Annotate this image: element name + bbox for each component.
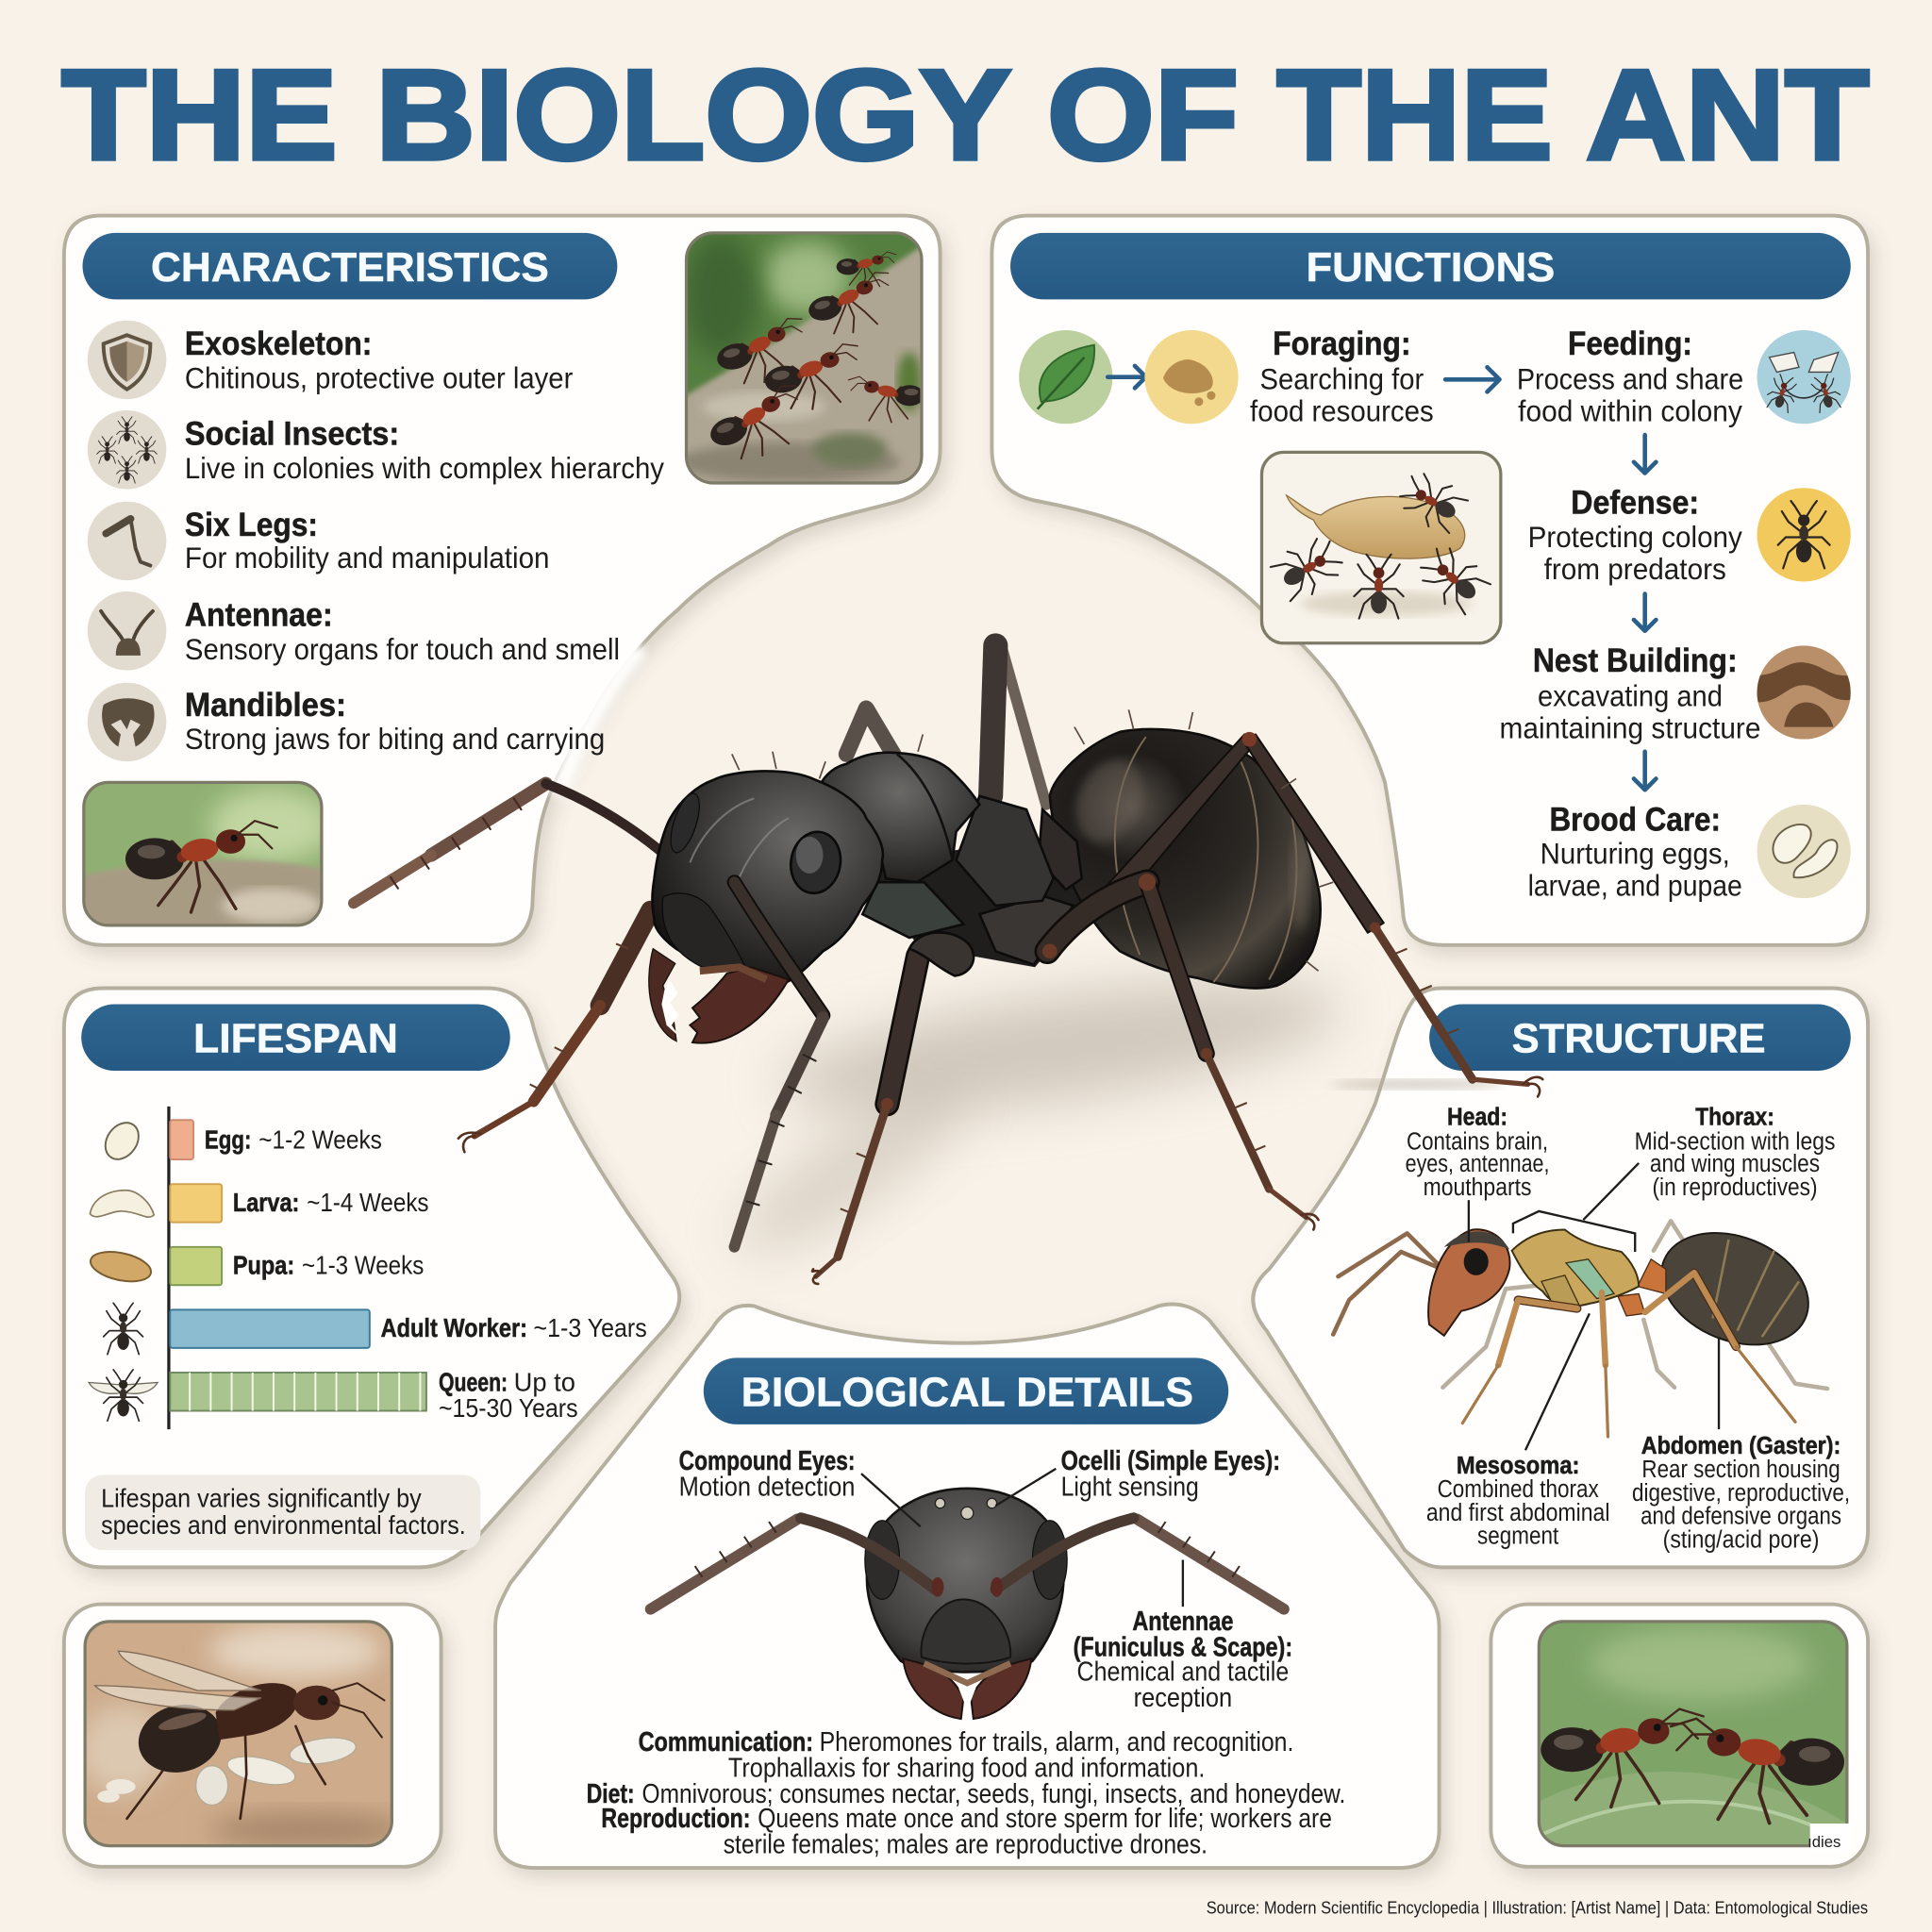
note: lifespan varies	[85, 1474, 480, 1550]
icon: social insects	[88, 410, 166, 490]
text: communication, diet, reproduction: Reproduction:	[601, 1804, 750, 1834]
far eye	[665, 791, 705, 856]
icon: food crumbs	[1144, 330, 1239, 424]
label: antennae	[1074, 1607, 1292, 1713]
icon: defense ant	[1757, 488, 1851, 581]
label: head: Head:	[1447, 1104, 1507, 1130]
text: social insects	[185, 416, 664, 485]
note: lifespan varies: species and environmental factors.	[101, 1510, 466, 1540]
text: communication, diet, reproduction: Diet:	[587, 1779, 635, 1809]
label: ocelli: Light sensing	[1061, 1473, 1199, 1503]
text: foraging	[1250, 325, 1434, 428]
heading pill: lifespan	[81, 1004, 510, 1071]
text: feeding: Feeding:	[1568, 325, 1692, 362]
label: pupa: ~1-3 Weeks	[302, 1251, 424, 1280]
panel: lifespan	[64, 989, 679, 1567]
label: antennae: (Funiculus & Scape):	[1074, 1632, 1292, 1662]
photo: ants carrying seed	[1261, 452, 1501, 643]
heading pill: functions	[1010, 233, 1851, 299]
illustration: central ant	[354, 643, 1542, 1284]
icon: antennae	[88, 591, 166, 671]
text: six legs: Six Legs:	[185, 507, 318, 543]
heading pill: biological details	[704, 1357, 1228, 1424]
label: queen: ~15-30 Years	[439, 1393, 578, 1423]
label: thorax: Thorax:	[1695, 1104, 1774, 1130]
photo: ants on a leaf: ıdies	[1807, 1833, 1840, 1851]
text: nest building: Nest Building:	[1533, 642, 1738, 679]
icon: pupa	[88, 1247, 154, 1287]
label: queen: Queen:	[439, 1368, 508, 1397]
label: ocelli: Ocelli (Simple Eyes):	[1061, 1446, 1280, 1476]
text: feeding: Process and share	[1517, 363, 1743, 396]
icon: trophallaxis	[1757, 330, 1851, 424]
source credit: Source: Modern Scientific Encyclopedia | Illustration: [Artist Name] | Data: Entomological Studies	[1207, 1897, 1868, 1917]
text: communication, diet, reproduction: Omnivorous; consumes nectar, seeds, fungi, insects, and honeydew.	[641, 1779, 1345, 1809]
label: abdomen: (sting/acid pore)	[1663, 1526, 1819, 1553]
bar: egg	[170, 1120, 193, 1159]
panel: characteristics	[64, 216, 941, 945]
text: foraging: Foraging:	[1273, 325, 1411, 362]
icon: larva	[90, 1191, 154, 1217]
text: nest building: maintaining structure	[1500, 711, 1760, 744]
label line: head	[1468, 1200, 1470, 1242]
near eye	[786, 828, 845, 897]
label: pupa	[233, 1251, 424, 1280]
label: mesosoma	[1426, 1453, 1609, 1550]
text: brood care: larvae, and pupae	[1528, 870, 1742, 903]
text: nest building	[1500, 642, 1760, 744]
heading pill: structure	[1429, 1004, 1851, 1071]
label: head	[1406, 1104, 1549, 1201]
gaster	[1050, 729, 1321, 989]
icon: worker ant	[104, 1303, 143, 1355]
photo: winged queen with brood	[79, 1622, 407, 1847]
text: nest building: excavating and	[1538, 679, 1723, 712]
near legs	[812, 734, 1542, 1284]
text: foraging: Searching for	[1260, 363, 1424, 396]
icon: nest	[1757, 645, 1851, 740]
text: defense: from predators	[1544, 553, 1726, 586]
clypeus	[662, 893, 745, 967]
near antenna	[734, 882, 823, 1247]
label line: mesosoma	[1525, 1313, 1590, 1450]
label line: antennae	[1182, 1560, 1184, 1607]
label: adult worker: ~1-3 Years	[534, 1313, 647, 1342]
icon: queen ant	[89, 1370, 158, 1421]
text: exoskeleton: Chitinous, protective outer layer	[185, 361, 573, 394]
body hairs	[732, 709, 1333, 971]
text: defense: Protecting colony	[1528, 521, 1742, 554]
label: abdomen: digestive, reproductive,	[1632, 1480, 1850, 1507]
text: exoskeleton	[185, 325, 573, 394]
mandibles	[649, 949, 789, 1043]
text: communication, diet, reproduction	[587, 1727, 1345, 1859]
text: social insects: Live in colonies with complex hierarchy	[185, 452, 664, 485]
label: mesosoma: Mesosoma:	[1457, 1453, 1579, 1479]
label: abdomen: Rear section housing	[1641, 1457, 1840, 1483]
bar: pupa	[170, 1247, 222, 1285]
icon: shield	[88, 321, 166, 399]
arrow	[1445, 367, 1500, 391]
text: exoskeleton: Exoskeleton:	[185, 325, 372, 362]
label: head: mouthparts	[1424, 1174, 1532, 1201]
text: feeding	[1517, 325, 1743, 428]
arrow	[1634, 435, 1656, 474]
label: queen	[439, 1368, 578, 1423]
panel: queen photo	[64, 1605, 441, 1867]
text: mandibles: Strong jaws for biting and carrying	[185, 723, 605, 756]
heading pill: characteristics	[83, 233, 617, 299]
icon: mandibles	[88, 683, 166, 761]
label: abdomen	[1632, 1433, 1850, 1553]
label: head: Contains brain,	[1407, 1129, 1548, 1156]
label: thorax: (in reproductives)	[1653, 1174, 1818, 1201]
label line: ocelli	[995, 1469, 1056, 1506]
note: lifespan varies: Lifespan varies significantly by	[101, 1483, 422, 1512]
text: social insects: Social Insects:	[185, 416, 399, 453]
text: communication, diet, reproduction: Communication:	[639, 1727, 813, 1757]
label: egg	[205, 1124, 382, 1154]
body backing	[862, 838, 1087, 967]
label: mesosoma: Combined thorax	[1438, 1476, 1599, 1503]
text: foraging: food resources	[1250, 395, 1434, 428]
text: defense	[1528, 485, 1742, 586]
label: abdomen: and defensive organs	[1641, 1504, 1841, 1530]
text: communication, diet, reproduction: Queens mate once and store sperm for life; workers are	[758, 1804, 1332, 1834]
head	[652, 771, 883, 983]
heading pill: lifespan: LIFESPAN	[193, 1016, 398, 1061]
illustration: ant head front view	[651, 1489, 1284, 1719]
icon: leaf	[1019, 330, 1112, 424]
text: antennae: Sensory organs for touch and smell	[185, 633, 620, 666]
text: mandibles	[185, 687, 605, 756]
label: ocelli	[1061, 1446, 1280, 1503]
label: egg: ~1-2 Weeks	[258, 1124, 382, 1154]
icon: brood	[1757, 805, 1851, 898]
photo: ants on a leaf	[1539, 1622, 1849, 1851]
label: compound eyes	[679, 1446, 855, 1503]
ground shadow	[718, 957, 1503, 1278]
diagram: labelled ant	[1333, 1212, 1827, 1437]
text: mandibles: Mandibles:	[185, 687, 346, 724]
text: brood care: Brood Care:	[1549, 801, 1721, 838]
bar: adult worker	[170, 1309, 370, 1348]
label: larva: Larva:	[233, 1188, 299, 1217]
label: thorax: Mid-section with legs	[1635, 1129, 1835, 1156]
label line: abdomen	[1718, 1337, 1720, 1429]
text: defense: Defense:	[1571, 485, 1699, 522]
label: adult worker	[381, 1313, 647, 1342]
label: larva: ~1-4 Weeks	[307, 1188, 429, 1217]
panel: functions	[991, 216, 1868, 945]
label: head: eyes, antennae,	[1406, 1151, 1549, 1177]
icon: egg	[98, 1116, 145, 1166]
label: pupa: Pupa:	[233, 1251, 294, 1280]
text: six legs: For mobility and manipulation	[185, 541, 550, 575]
far antenna	[354, 784, 677, 903]
bar: queen	[170, 1373, 426, 1411]
label: compound eyes: Motion detection	[679, 1473, 855, 1503]
chart: lifespan bars	[169, 1107, 426, 1429]
text: antennae: Antennae:	[185, 597, 333, 634]
text: brood care	[1528, 801, 1742, 903]
coxa	[909, 932, 974, 975]
text: brood care: Nurturing eggs,	[1541, 838, 1730, 871]
title: THE BIOLOGY OF THE ANT	[61, 42, 1869, 186]
label line: compound eyes	[861, 1474, 921, 1526]
text: communication, diet, reproduction: Pheromones for trails, alarm, and recognition.	[820, 1727, 1293, 1757]
label: abdomen: Abdomen (Gaster):	[1641, 1433, 1840, 1459]
label: thorax	[1635, 1104, 1835, 1201]
arrow	[1634, 752, 1656, 790]
label: mesosoma: segment	[1477, 1524, 1558, 1550]
label: compound eyes: Compound Eyes:	[679, 1446, 855, 1476]
label: antennae: reception	[1134, 1683, 1232, 1713]
panel: biological details	[495, 1305, 1440, 1868]
far legs	[458, 643, 1046, 1152]
bracket and line: thorax	[1513, 1163, 1639, 1252]
text: communication, diet, reproduction: Trophallaxis for sharing food and information.	[728, 1753, 1205, 1783]
label: queen: Up to	[514, 1368, 575, 1397]
heading pill: characteristics: CHARACTERISTICS	[151, 245, 549, 291]
label: mesosoma: and first abdominal	[1426, 1500, 1609, 1526]
photo: ants on rock	[677, 233, 930, 492]
heading pill: biological details: BIOLOGICAL DETAILS	[741, 1370, 1193, 1415]
bar: larva	[170, 1184, 222, 1223]
text: six legs	[185, 507, 550, 575]
heading pill: functions: FUNCTIONS	[1306, 245, 1555, 291]
leg joints and tarsus hairs	[530, 732, 1458, 1214]
panel: structure	[1253, 989, 1868, 1567]
arrow	[1108, 366, 1146, 388]
text: communication, diet, reproduction: sterile females; males are reproductive drones.	[724, 1829, 1208, 1859]
label: egg: Egg:	[205, 1124, 251, 1154]
text: antennae	[185, 597, 620, 666]
thorax	[820, 753, 1082, 965]
panel: two ants photo	[1491, 1605, 1868, 1867]
heading pill: structure: STRUCTURE	[1512, 1016, 1766, 1061]
text: feeding: food within colony	[1518, 395, 1742, 428]
label: antennae: Chemical and tactile	[1077, 1657, 1289, 1688]
photo: single ant on soil	[74, 782, 333, 934]
label: thorax: and wing muscles	[1650, 1151, 1820, 1177]
label: antennae: Antennae	[1132, 1607, 1233, 1637]
arrow	[1634, 594, 1656, 631]
label: adult worker: Adult Worker:	[381, 1313, 527, 1342]
icon: leg	[88, 502, 166, 580]
label: larva	[233, 1188, 429, 1217]
